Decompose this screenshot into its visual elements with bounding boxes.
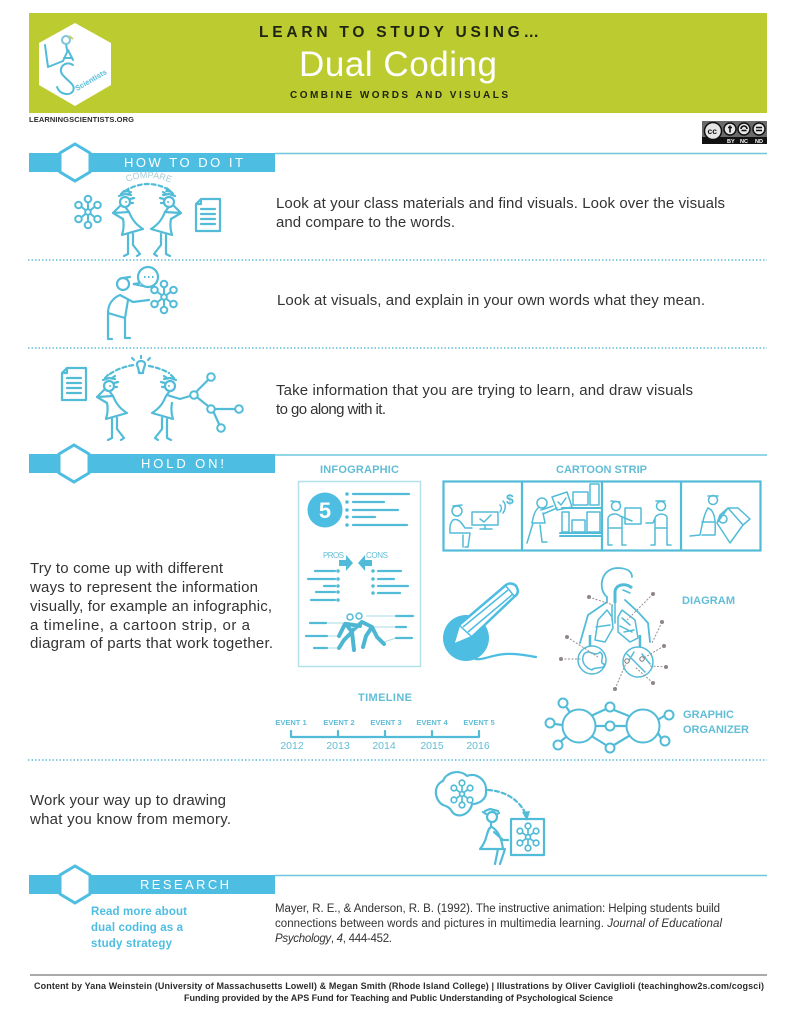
section header: research: RESEARCH bbox=[140, 877, 229, 892]
section header: how to do it bbox=[29, 144, 767, 181]
footer credits bbox=[30, 975, 767, 1003]
section header: how to do it: HOW TO DO IT bbox=[124, 155, 243, 170]
infographic example bbox=[298, 482, 420, 666]
logo hexagon bbox=[39, 23, 111, 106]
icon: compare words and visuals: COMPARE bbox=[126, 172, 172, 182]
text: step 3: to go along with it. bbox=[276, 401, 386, 418]
text: represent information: ways to represent the information bbox=[29, 579, 258, 596]
link text: read more bbox=[91, 906, 187, 950]
text: from memory: what you know from memory. bbox=[29, 811, 231, 828]
infographic example: CONS bbox=[366, 551, 388, 560]
link text: read more: Read more about bbox=[91, 906, 187, 918]
creative commons badge: ND bbox=[755, 139, 763, 145]
timeline example bbox=[275, 718, 495, 752]
section header: hold on bbox=[29, 445, 767, 482]
text: step 1: and compare to the words. bbox=[276, 214, 455, 231]
label: graphic organizer: GRAPHIC bbox=[683, 709, 734, 721]
timeline example: 2013 bbox=[326, 740, 350, 752]
text: step 2: Look at visuals, and explain in your own words what they mean. bbox=[277, 292, 705, 309]
link text: read more: study strategy bbox=[91, 938, 173, 950]
text: step 1: Look at your class materials and find visuals. Look over the visuals bbox=[276, 195, 725, 212]
timeline example: 2012 bbox=[280, 740, 304, 752]
icon: drawing a visual from information bbox=[62, 356, 243, 440]
citation: connections between words and pictures in multimedia learning. Journal of Educational bbox=[275, 918, 722, 930]
subtitle: COMBINE WORDS AND VISUALS bbox=[290, 90, 508, 101]
text: step 3: Take information that you are trying to learn, and draw visuals bbox=[276, 382, 693, 399]
icon: compare words and visuals bbox=[74, 172, 222, 258]
diagram: human lungs bbox=[559, 568, 668, 691]
citation: Psychology, 4, 444-452. bbox=[275, 933, 392, 945]
cartoon panel 4 bbox=[690, 496, 750, 543]
footer credits: Content by Yana Weinstein (University of Massachusetts Lowell) & Megan Smith (Rhode Island College) | Illustrations by Oliver Caviglioli (teachinghow2s.com/cogsci) bbox=[34, 981, 764, 991]
timeline example: 2015 bbox=[420, 740, 444, 752]
cartoon panel 1 bbox=[450, 491, 514, 547]
divider bbox=[28, 347, 767, 349]
text: represent information: diagram of parts that work together. bbox=[30, 635, 273, 652]
citation bbox=[275, 903, 722, 945]
text: step 3 bbox=[276, 382, 693, 418]
header kicker: LEARN TO STUDY USING… bbox=[259, 24, 539, 41]
infographic example: PROS bbox=[323, 551, 344, 560]
label: graphic organizer bbox=[683, 709, 749, 736]
icon: drawing from memory bbox=[436, 772, 544, 864]
text: represent information: Try to come up with different bbox=[30, 560, 224, 577]
text: from memory: Work your way up to drawing bbox=[30, 792, 226, 809]
timeline example: 2014 bbox=[372, 740, 396, 752]
timeline example: EVENT 3 bbox=[370, 718, 402, 727]
citation: Mayer, R. E., & Anderson, R. B. (1992). The instructive animation: Helping students build bbox=[275, 903, 720, 915]
label: timeline: TIMELINE bbox=[358, 692, 412, 704]
graphic organizer example bbox=[546, 698, 674, 752]
creative commons badge: BY bbox=[727, 139, 735, 145]
footer credits: Funding provided by the APS Fund for Teaching and Public Understanding of Psychological Science bbox=[184, 993, 613, 1003]
header banner bbox=[29, 13, 767, 113]
cartoon strip example bbox=[444, 481, 760, 551]
label: graphic organizer: ORGANIZER bbox=[683, 724, 749, 736]
cartoon panel 1: $ bbox=[506, 491, 514, 507]
cartoon panel 3 bbox=[608, 501, 671, 545]
timeline example: EVENT 4 bbox=[416, 718, 448, 727]
link text: read more: dual coding as a bbox=[91, 922, 184, 934]
timeline example: EVENT 1 bbox=[275, 718, 307, 727]
label: cartoon strip: CARTOON STRIP bbox=[556, 464, 647, 476]
creative commons badge bbox=[702, 121, 767, 145]
icon: explaining a visual bbox=[108, 267, 177, 339]
text: represent information: a timeline, a cartoon strip, or a bbox=[30, 617, 251, 634]
section header: hold on: HOLD ON! bbox=[141, 456, 224, 471]
section header: research bbox=[29, 866, 767, 903]
cartoon panel 2 bbox=[527, 484, 602, 543]
text: represent information: visually, for example an infographic, bbox=[30, 598, 272, 615]
infographic example: 5 bbox=[319, 498, 331, 523]
timeline example: EVENT 2 bbox=[323, 718, 355, 727]
main title: Dual Coding bbox=[299, 45, 497, 84]
divider bbox=[28, 259, 767, 261]
timeline example: EVENT 5 bbox=[463, 718, 495, 727]
illustration: pencil drawing bbox=[443, 584, 536, 661]
divider bbox=[28, 759, 767, 761]
label: diagram: DIAGRAM bbox=[682, 595, 735, 607]
text: from memory bbox=[29, 792, 231, 828]
creative commons badge: NC bbox=[740, 139, 748, 145]
logo hexagon: Scientists bbox=[74, 67, 108, 93]
text: represent information bbox=[29, 560, 273, 652]
creative commons badge: cc bbox=[708, 126, 717, 136]
text: step 1 bbox=[276, 195, 725, 231]
label: infographic: INFOGRAPHIC bbox=[320, 464, 399, 476]
website: LEARNINGSCIENTISTS.ORG bbox=[29, 115, 134, 124]
timeline example: 2016 bbox=[466, 740, 490, 752]
